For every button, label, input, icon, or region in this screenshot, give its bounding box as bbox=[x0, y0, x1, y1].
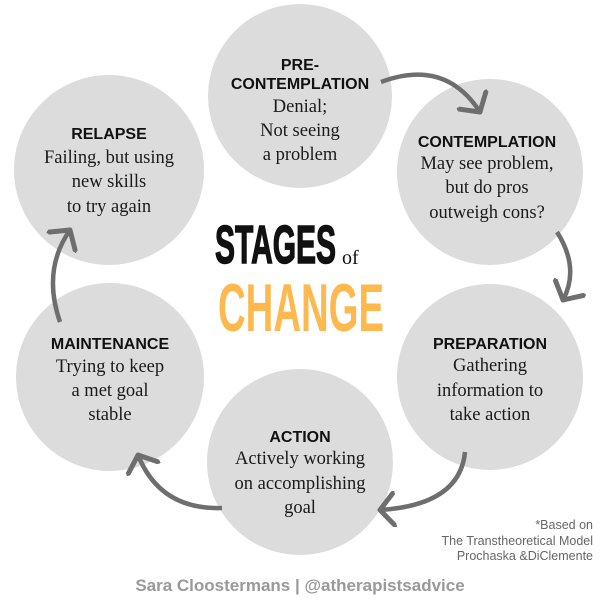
stage: pre-contemplation: Denial; bbox=[273, 97, 327, 117]
arrow: preparation to action bbox=[380, 452, 465, 510]
stage: preparation: take action bbox=[450, 405, 530, 425]
stage: contemplation: CONTEMPLATION bbox=[418, 134, 556, 151]
stage: maintenance: a met goal bbox=[71, 381, 149, 401]
stage: maintenance: Trying to keep bbox=[56, 357, 164, 377]
arrow: pre to contemplation bbox=[381, 75, 480, 112]
stage: action bbox=[207, 369, 393, 555]
stage: maintenance bbox=[16, 283, 204, 471]
stage: contemplation: but do pros bbox=[445, 178, 529, 198]
note: based on: The Transtheoretical Model bbox=[442, 534, 593, 548]
note: based on: *Based on bbox=[535, 518, 593, 532]
stage: preparation: Gathering bbox=[453, 356, 527, 376]
stage: relapse: to try again bbox=[67, 197, 151, 217]
stage: maintenance: MAINTENANCE bbox=[51, 336, 169, 353]
note: based on bbox=[442, 518, 593, 563]
arrow: contemplation to preparation bbox=[557, 232, 570, 300]
stage: relapse: new skills bbox=[72, 172, 146, 192]
stage: maintenance: stable bbox=[88, 405, 132, 425]
stage: action: Actively working bbox=[235, 449, 365, 469]
note: based on: Prochaska &DiClemente bbox=[457, 549, 593, 563]
stage: pre-contemplation: a problem bbox=[263, 145, 338, 165]
stage: pre-contemplation bbox=[208, 4, 392, 188]
title: of bbox=[342, 247, 359, 269]
stage: relapse: RELAPSE bbox=[71, 126, 147, 143]
stage: contemplation: outweigh cons? bbox=[429, 203, 545, 223]
title: STAGES bbox=[215, 215, 336, 275]
stage: action: on accomplishing bbox=[234, 474, 366, 494]
arrow: maintenance to relapse bbox=[53, 230, 70, 322]
stage: contemplation: May see problem, bbox=[420, 154, 554, 174]
stage: pre-contemplation: CONTEMPLATION bbox=[231, 76, 369, 93]
stage: pre-contemplation: PRE- bbox=[281, 57, 319, 74]
title: CHANGE bbox=[218, 270, 384, 346]
arrow: action to maintenance bbox=[138, 455, 222, 508]
stage: contemplation bbox=[397, 79, 583, 265]
footer credit: Sara Cloostermans | @atherapistsadvice bbox=[135, 576, 465, 595]
stage: preparation bbox=[397, 284, 583, 470]
stage: relapse bbox=[14, 75, 204, 265]
stage: preparation: information to bbox=[437, 381, 543, 401]
stage: action: goal bbox=[284, 498, 316, 518]
stage: preparation: PREPARATION bbox=[433, 336, 547, 353]
stage: relapse: Failing, but using bbox=[44, 148, 174, 168]
stage: action: ACTION bbox=[269, 429, 331, 446]
title bbox=[215, 215, 384, 346]
stage: pre-contemplation: Not seeing bbox=[260, 121, 340, 141]
